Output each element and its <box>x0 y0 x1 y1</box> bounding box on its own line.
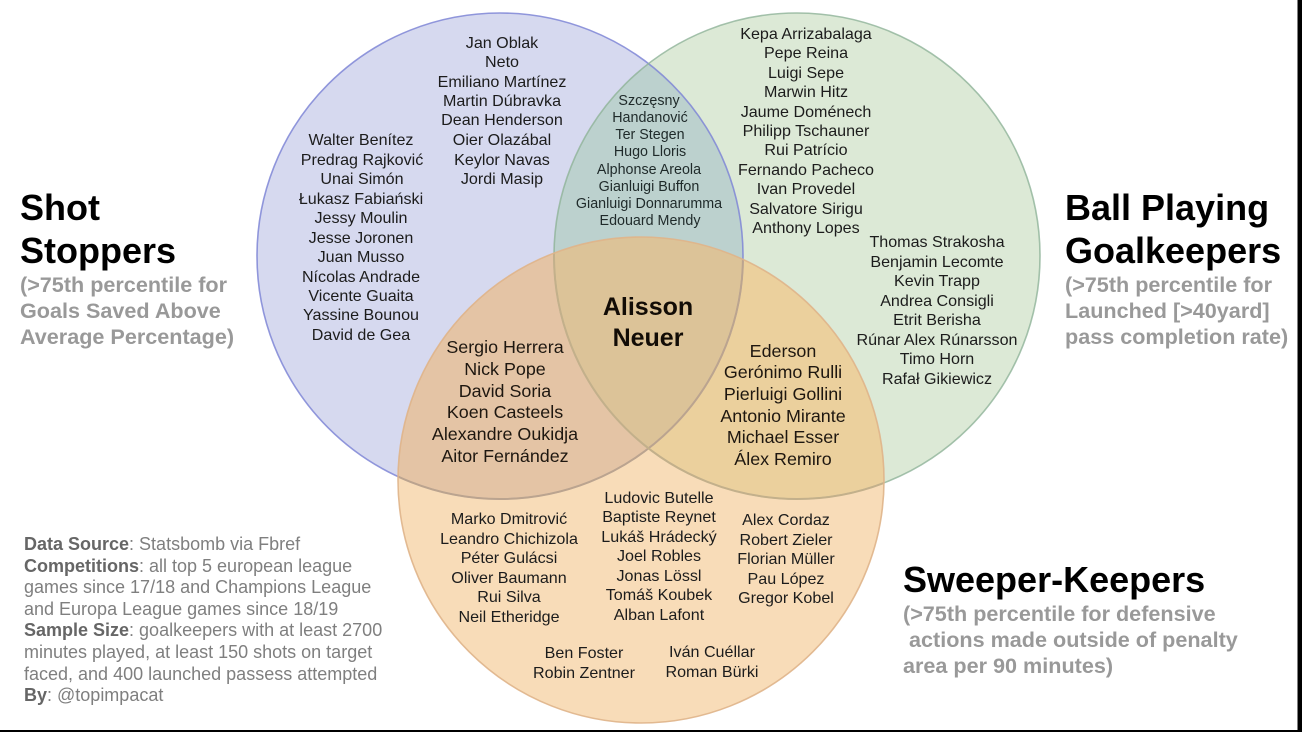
ball playing names: top column: Pepe Reina <box>764 44 848 62</box>
heading: sweeper-keepers: actions made outside of penalty <box>903 627 1238 652</box>
shot stoppers names: top column: Jan Oblak <box>466 34 539 52</box>
shot stoppers and ball playing names: Gianluigi Buffon <box>599 179 699 195</box>
shot stoppers names: left column: Walter Benítez <box>309 131 413 149</box>
shot stoppers and sweeper-keepers names: Aitor Fernández <box>441 446 569 466</box>
heading: shot stoppers: Stoppers <box>20 230 176 271</box>
shot stoppers names: left column: Jessy Moulin <box>314 209 408 227</box>
sweeper-keepers names: bottom right <box>665 643 759 681</box>
ball playing names: top column: Anthony Lopes <box>752 219 860 237</box>
outline: shot stoppers <box>257 13 743 499</box>
shot stoppers and ball playing names: Gianluigi Donnarumma <box>576 196 722 212</box>
shot stoppers names: left column: Predrag Rajković <box>301 151 423 169</box>
overlap: shot stoppers and ball playing <box>554 64 742 258</box>
sweeper-keepers names: bottom left <box>533 644 636 682</box>
ball playing and sweeper-keepers names: Gerónimo Rulli <box>724 362 842 382</box>
heading: sweeper-keepers: (>75th percentile for defensive <box>903 601 1216 626</box>
heading: ball playing goalkeepers: Ball Playing <box>1065 187 1269 228</box>
data source notes: minutes played, at least 150 shots on target <box>24 642 372 662</box>
sweeper-keepers names: bottom right: Roman Bürki <box>665 663 759 681</box>
outline: ball playing, muted under sweeper-keepers <box>553 254 884 500</box>
outline: shot stoppers, muted under sweeper-keepers <box>398 260 744 500</box>
shot stoppers names: top column: Emiliano Martínez <box>438 73 566 91</box>
heading: ball playing goalkeepers: pass completion rate) <box>1065 324 1288 349</box>
shot stoppers names: top column: Dean Henderson <box>441 111 563 129</box>
overlap: ball playing and sweeper-keepers <box>650 260 884 498</box>
shot stoppers and sweeper-keepers names: David Soria <box>459 381 551 401</box>
ball playing names: top column: Rui Patrício <box>764 141 848 159</box>
shot stoppers names: left column: Yassine Bounou <box>303 306 419 324</box>
sweeper-keepers names: bottom left: Ben Foster <box>545 644 624 662</box>
heading: ball playing goalkeepers <box>1065 187 1288 349</box>
shot stoppers names: left column: Łukasz Fabiański <box>299 190 423 208</box>
sweeper-keepers names: right column: Alex Cordaz <box>742 511 830 529</box>
shot stoppers names: top column: Keylor Navas <box>454 151 550 169</box>
ball playing names: right column: Andrea Consigli <box>880 292 994 310</box>
sweeper-keepers names: middle column <box>601 489 718 624</box>
shot stoppers and sweeper-keepers names: Nick Pope <box>464 359 546 379</box>
sweeper-keepers names: left column: Leandro Chichizola <box>440 530 578 548</box>
venn diagram circles <box>257 13 1040 723</box>
heading: shot stoppers: Goals Saved Above <box>20 298 221 323</box>
sweeper-keepers names: middle column: Ludovic Butelle <box>604 489 714 507</box>
shot stoppers and ball playing names <box>576 93 722 229</box>
shot stoppers names: top column: Martin Dúbravka <box>443 92 561 110</box>
shot stoppers names: left column: Vicente Guaita <box>308 287 414 305</box>
ball playing and sweeper-keepers names: Ederson <box>750 341 816 361</box>
shot stoppers names: left column: Nícolas Andrade <box>302 268 420 286</box>
sweeper-keepers names: left column: Neil Etheridge <box>458 608 560 626</box>
heading: sweeper-keepers: area per 90 minutes) <box>903 653 1113 678</box>
sweeper-keepers names: bottom left: Robin Zentner <box>533 664 636 682</box>
heading: shot stoppers: Average Percentage) <box>20 324 234 349</box>
overlap: shot stoppers and sweeper-keepers <box>399 254 647 498</box>
ball playing names: top column: Philipp Tschauner <box>743 122 870 140</box>
sweeper-keepers names: middle column: Joel Robles <box>617 547 701 565</box>
sweeper-keepers names: right column: Gregor Kobel <box>738 589 834 607</box>
shot stoppers names: top column: Jordi Masip <box>461 170 543 188</box>
shot stoppers and ball playing names: Hugo Lloris <box>614 144 686 160</box>
shot stoppers and sweeper-keepers names: Alexandre Oukidja <box>432 424 578 444</box>
shot stoppers names: left column: David de Gea <box>312 326 410 344</box>
ball playing names: right column: Benjamin Lecomte <box>870 253 1004 271</box>
outline: sweeper-keepers <box>398 237 884 723</box>
ball playing names: top column: Ivan Provedel <box>757 180 855 198</box>
ball playing names: top column: Luigi Sepe <box>768 64 844 82</box>
sweeper-keepers names: middle column: Baptiste Reynet <box>602 508 716 526</box>
overlap: all three <box>555 238 742 447</box>
ball playing names: top column: Marwin Hitz <box>764 83 848 101</box>
shot stoppers and sweeper-keepers names: Sergio Herrera <box>446 337 564 357</box>
heading: shot stoppers: Shot <box>20 187 100 228</box>
sweeper-keepers names: left column: Marko Dmitrović <box>451 510 567 528</box>
ball playing and sweeper-keepers names: Pierluigi Gollini <box>724 384 842 404</box>
data source notes: faced, and 400 launched passess attempted <box>24 664 377 684</box>
ball playing names: right column: Rafał Gikiewicz <box>882 370 992 388</box>
shot stoppers and sweeper-keepers names <box>432 337 578 466</box>
sweeper-keepers names: right column <box>737 511 835 607</box>
sweeper-keepers names: bottom right: Iván Cuéllar <box>669 643 756 661</box>
centre names: all three categories: Alisson <box>603 293 693 321</box>
sweeper-keepers names: left column: Oliver Baumann <box>451 569 567 587</box>
shot stoppers and ball playing names: Ter Stegen <box>615 127 685 143</box>
ball playing names: right column <box>856 233 1018 388</box>
shot stoppers names: left column: Jesse Joronen <box>309 229 413 247</box>
circle: ball playing goalkeepers <box>554 13 1040 499</box>
data source notes: games since 17/18 and Champions League <box>24 577 371 597</box>
ball playing names: right column: Timo Horn <box>900 350 974 368</box>
ball playing names: top column: Jaume Doménech <box>741 103 871 121</box>
ball playing and sweeper-keepers names <box>720 341 846 469</box>
sweeper-keepers names: middle column: Jonas Lössl <box>616 567 702 585</box>
ball playing and sweeper-keepers names: Michael Esser <box>727 427 839 447</box>
heading: shot stoppers: (>75th percentile for <box>20 272 228 297</box>
shot stoppers and ball playing names: Edouard Mendy <box>600 213 701 229</box>
shot stoppers names: top column: Neto <box>485 53 519 71</box>
ball playing names: top column: Fernando Pacheco <box>738 161 874 179</box>
sweeper-keepers names: middle column: Alban Lafont <box>614 606 705 624</box>
data source notes: By: @topimpacat <box>24 685 163 705</box>
sweeper-keepers names: middle column: Lukáš Hrádecký <box>601 528 718 546</box>
ball playing names: right column: Etrit Berisha <box>893 311 981 329</box>
sweeper-keepers names: right column: Robert Zieler <box>739 531 833 549</box>
ball playing and sweeper-keepers names: Antonio Mirante <box>720 406 846 426</box>
heading: shot stoppers <box>20 187 234 349</box>
shot stoppers and ball playing names: Alphonse Areola <box>597 162 701 178</box>
data source notes: Sample Size: goalkeepers with at least 2700 <box>24 620 382 640</box>
ball playing and sweeper-keepers names: Álex Remiro <box>734 449 832 469</box>
ball playing names: right column: Thomas Strakosha <box>869 233 1005 251</box>
shot stoppers names: left column <box>299 131 423 344</box>
shot stoppers and ball playing names: Handanović <box>612 110 688 126</box>
ball playing names: top column: Salvatore Sirigu <box>749 200 863 218</box>
heading: ball playing goalkeepers: Launched [>40yard] <box>1065 298 1270 323</box>
circle: sweeper-keepers <box>398 237 884 723</box>
circle: shot stoppers <box>257 13 743 499</box>
data source notes <box>24 534 382 705</box>
outline: ball playing <box>554 13 1040 499</box>
heading: ball playing goalkeepers: (>75th percentile for <box>1065 272 1273 297</box>
sweeper-keepers names: right column: Florian Müller <box>737 550 835 568</box>
ball playing names: right column: Rúnar Alex Rúnarsson <box>856 331 1018 349</box>
shot stoppers names: left column: Juan Musso <box>318 248 404 266</box>
sweeper-keepers names: left column <box>440 510 578 626</box>
sweeper-keepers names: right column: Pau López <box>748 570 824 588</box>
data source notes: Data Source: Statsbomb via Fbref <box>24 534 301 554</box>
ball playing names: top column <box>738 25 874 237</box>
centre names: all three categories: Neuer <box>613 324 684 352</box>
centre names: all three categories <box>603 293 693 352</box>
sweeper-keepers names: left column: Péter Gulácsi <box>461 549 557 567</box>
heading: sweeper-keepers <box>903 559 1238 678</box>
shot stoppers names: left column: Unai Simón <box>320 170 404 188</box>
heading: ball playing goalkeepers: Goalkeepers <box>1065 230 1281 271</box>
ball playing names: right column: Kevin Trapp <box>894 272 980 290</box>
ball playing names: top column: Kepa Arrizabalaga <box>740 25 872 43</box>
sweeper-keepers names: middle column: Tomáš Koubek <box>606 586 713 604</box>
data source notes: Competitions: all top 5 european league <box>24 556 352 576</box>
heading: sweeper-keepers: Sweeper-Keepers <box>903 559 1205 600</box>
sweeper-keepers names: left column: Rui Silva <box>477 588 541 606</box>
shot stoppers names: top column: Oier Olazábal <box>453 131 551 149</box>
data source notes: and Europa League games since 18/19 <box>24 599 338 619</box>
shot stoppers and sweeper-keepers names: Koen Casteels <box>447 402 563 422</box>
shot stoppers names: top column <box>438 34 566 188</box>
shot stoppers and ball playing names: Szczęsny <box>618 93 680 109</box>
